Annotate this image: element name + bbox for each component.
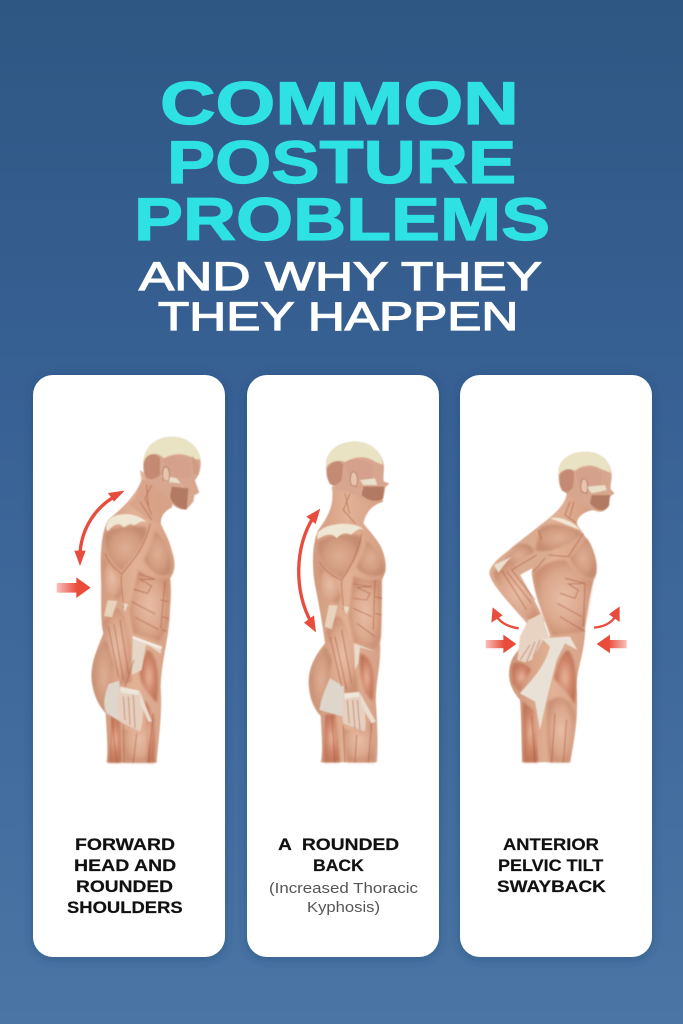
label: forward head: ROUNDED: [76, 877, 173, 896]
card 1: [33, 375, 225, 957]
subtitle line: THEY HAPPEN: THEY HAPPEN: [158, 293, 518, 339]
label: anterior pelvic tilt: PELVIC TILT: [498, 855, 604, 875]
figure: anterior pelvic tilt anatomy: [486, 452, 627, 762]
label: anterior pelvic tilt: [497, 835, 606, 896]
arrow: right curved arrow: [594, 606, 620, 628]
arrow: left horizontal arrow: [486, 635, 516, 653]
label: forward head: [67, 834, 183, 917]
label: rounded back: BACK: [313, 855, 364, 875]
title line: POSTURE: POSTURE: [167, 130, 516, 197]
card 2: [247, 375, 439, 957]
arrow: horizontal arrow at upper back: [57, 577, 91, 598]
label: anterior pelvic tilt: ANTERIOR: [503, 835, 599, 854]
card 3: [460, 375, 652, 957]
label: rounded back: (Increased Thoracic: [269, 881, 418, 897]
figure: rounded back anatomy: [299, 442, 389, 762]
arrow: left curved arrow: [491, 607, 519, 628]
title line: COMMON: COMMON: [160, 70, 519, 137]
panel: forward head: [33, 375, 225, 957]
arrow: curved double arrow: [74, 491, 125, 566]
panel: anterior pelvic tilt: [460, 375, 652, 957]
title: [134, 70, 550, 253]
label: rounded back: Kyphosis): [307, 900, 380, 916]
label: rounded back: A ROUNDED: [278, 835, 399, 854]
arrow: right horizontal arrow: [597, 635, 627, 653]
label: forward head: HEAD AND: [74, 855, 176, 875]
arrow: long curved double arrow: [299, 509, 320, 632]
figure: forward head posture anatomy: [57, 437, 201, 763]
label: anterior pelvic tilt: SWAYBACK: [497, 877, 606, 896]
subtitle: [139, 254, 542, 339]
label: forward head: FORWARD: [75, 834, 175, 854]
subtitle line: AND WHY THEY: AND WHY THEY: [139, 254, 542, 299]
title line: PROBLEMS: PROBLEMS: [134, 186, 550, 253]
label: rounded back: [269, 835, 418, 916]
panel: rounded back: [247, 375, 439, 957]
label: forward head: SHOULDERS: [67, 898, 183, 917]
